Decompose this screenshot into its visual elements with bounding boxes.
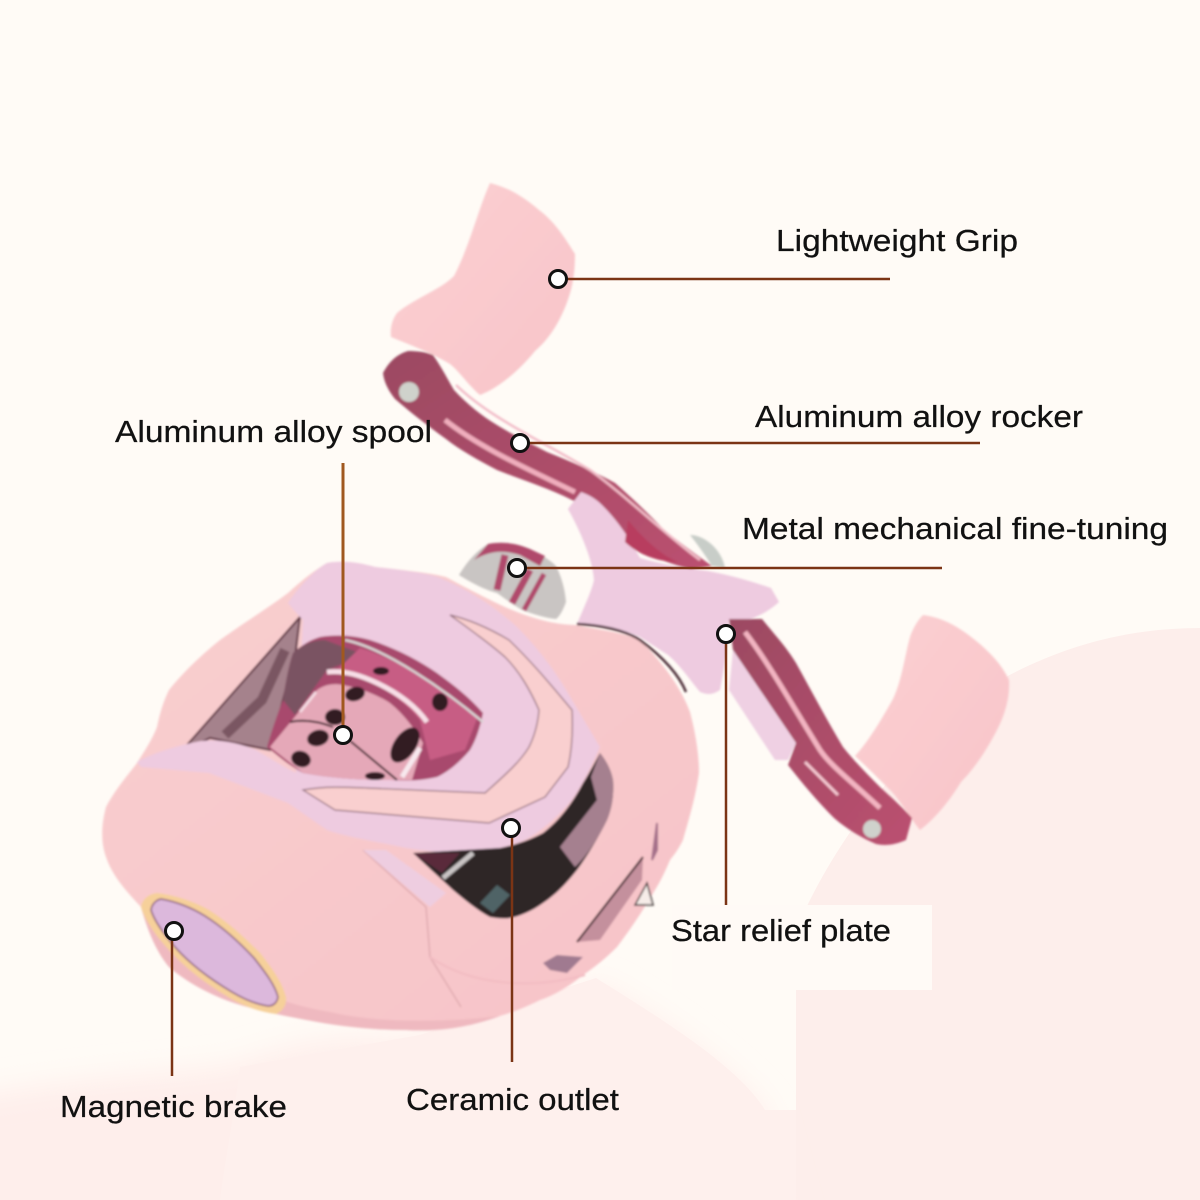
frame peach stripe [303,615,572,823]
bracket over rocker [568,492,640,580]
gear compartment [413,753,613,918]
spool drum face [270,684,423,780]
side slits [577,857,643,942]
lower lavender strip [363,850,446,907]
fine-tuning knob [459,543,566,619]
upper rocker arm [383,351,712,569]
spool holes [289,667,448,780]
callout: metal mechanical fine-tuning [508,511,1168,576]
callout: star relief plate [671,626,891,948]
callout: aluminum alloy rocker: Aluminum alloy rocker [755,399,1083,434]
callout: aluminum alloy spool: Aluminum alloy spool [115,414,432,449]
lavender lower arm plate [729,650,796,760]
callout: aluminum alloy spool [115,414,432,744]
callout: lightweight grip: Lightweight Grip [776,223,1018,258]
callout: lightweight grip [550,223,1018,288]
star relief plate arm [729,619,912,845]
reel neck and bracket [568,492,779,694]
lavender frame [137,562,600,852]
pink spool ring [335,648,478,760]
callout: star relief plate: Star relief plate [671,913,891,948]
spool cavity [283,640,365,715]
reel body [102,562,699,1030]
upper handle grip [391,183,575,395]
callout: ceramic outlet [406,820,619,1117]
magnetic brake cover [141,893,286,1014]
callout: aluminum alloy rocker [512,399,1083,452]
metal thumb cap [690,535,725,568]
side plate shading [141,907,500,1030]
callout: ceramic outlet: Ceramic outlet [406,1082,619,1117]
callout: metal mechanical fine-tuning: Metal mechanical fine-tuning [742,511,1168,546]
lower handle grip [855,615,1009,830]
spool window [267,636,483,781]
callout: magnetic brake [60,922,287,1124]
icon: fishing reel [102,183,1009,1030]
callout: magnetic brake: Magnetic brake [60,1089,287,1124]
grey window strip [180,617,300,753]
